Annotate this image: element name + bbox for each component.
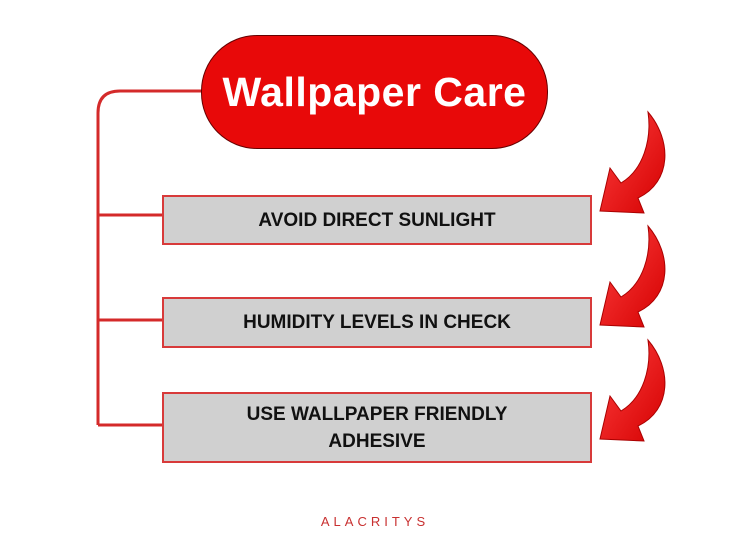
arrow 2 [600, 226, 665, 327]
box 1 [162, 195, 592, 245]
title pill [201, 35, 548, 149]
arrow 3 [600, 340, 665, 441]
box 3 [162, 392, 592, 463]
box 2 [162, 297, 592, 348]
box 2: HUMIDITY LEVELS IN CHECK [243, 312, 511, 333]
title pill: Wallpaper Care [222, 68, 526, 114]
footer brand: ALACRITYS [321, 514, 429, 529]
box 1: AVOID DIRECT SUNLIGHT [258, 210, 496, 230]
box 3: USE WALLPAPER FRIENDLY [247, 404, 507, 424]
box 3: ADHESIVE [328, 430, 426, 452]
arrow 1 [600, 112, 665, 213]
